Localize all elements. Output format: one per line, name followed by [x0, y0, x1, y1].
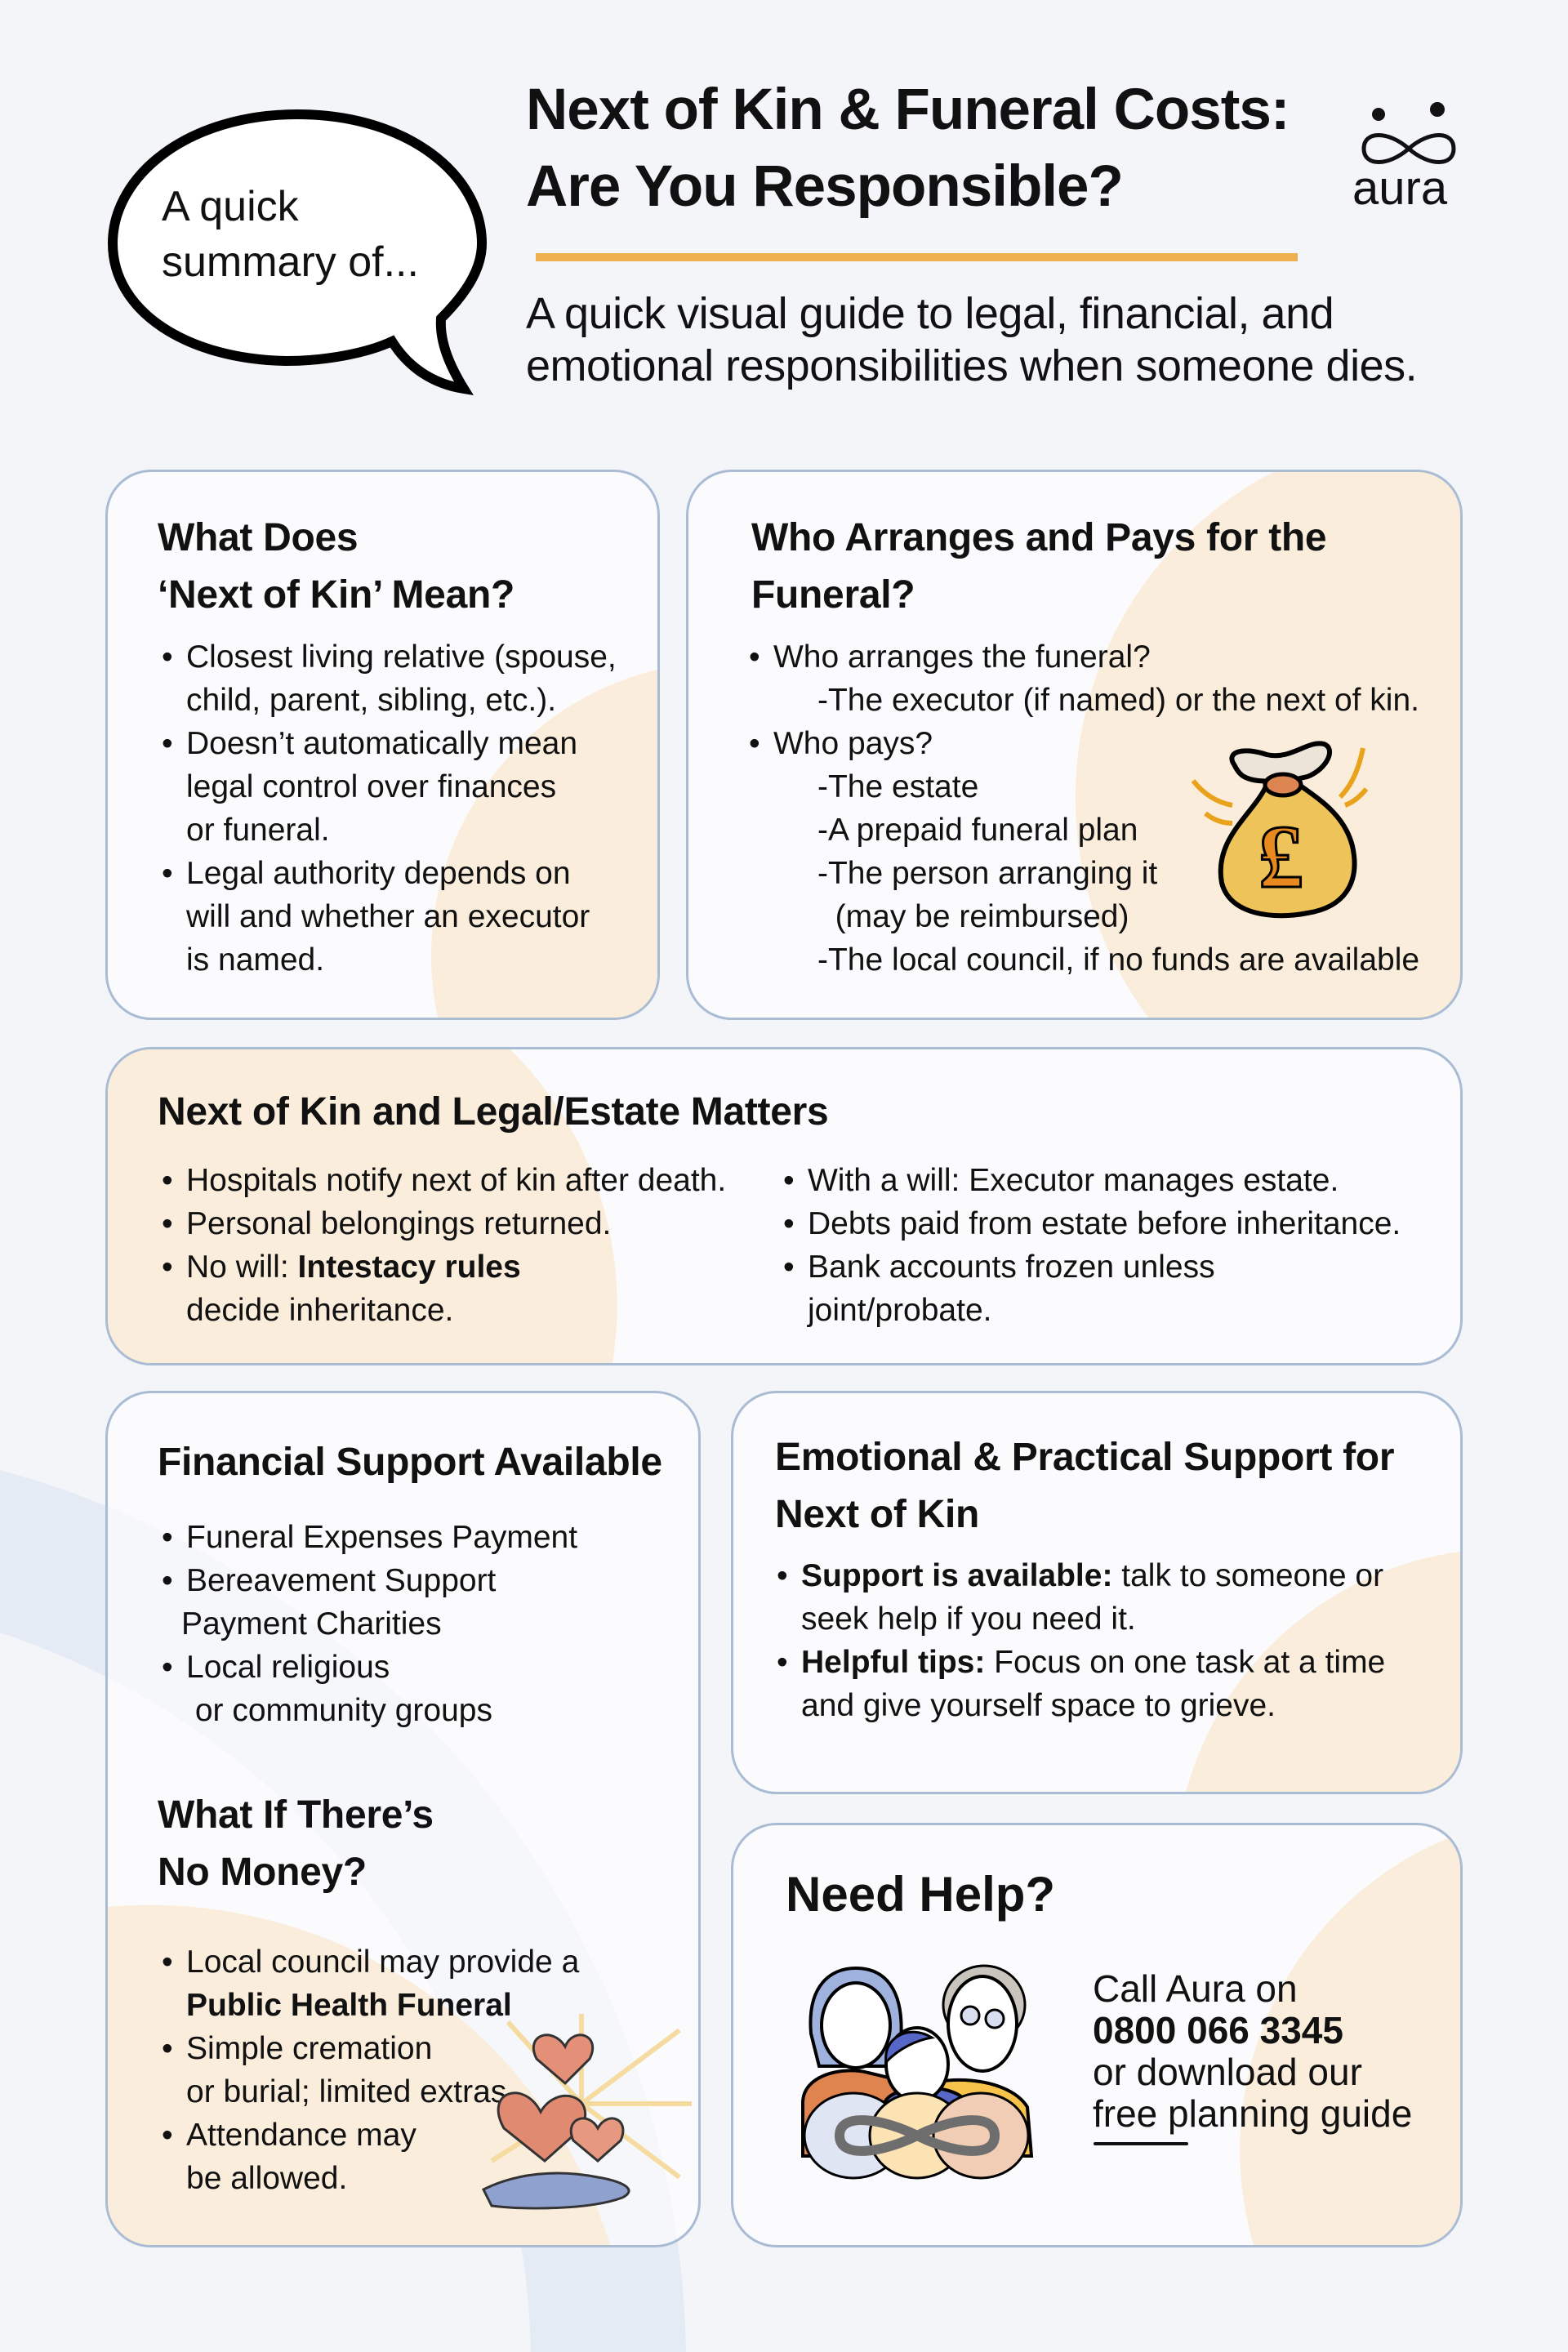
heading: [158, 516, 514, 617]
left bullets: Hospitals notify next of kin after death.: [186, 1163, 726, 1198]
bullets 2: Public Health Funeral: [186, 1988, 512, 2023]
bullets: (may be reimbursed): [835, 899, 1129, 934]
right bullets: Debts paid from estate before inheritance.: [808, 1206, 1401, 1241]
heading: What Does: [158, 516, 358, 559]
bullets: and give yourself space to grieve.: [801, 1688, 1276, 1723]
bullets: Legal authority depends on: [186, 856, 571, 891]
panel: financial support: [105, 1391, 701, 2247]
bullets: child, parent, sibling, etc.).: [186, 683, 556, 718]
heading: [775, 1436, 1394, 1536]
heading: no money: No Money?: [158, 1851, 367, 1894]
title: [526, 78, 1290, 219]
title: Are You Responsible?: [526, 154, 1123, 219]
heading: no money: What If There’s: [158, 1793, 434, 1837]
bullets: [163, 1520, 577, 1728]
right bullets: With a will: Executor manages estate.: [808, 1163, 1339, 1198]
bullets 2: Attendance may: [186, 2118, 416, 2153]
call text: Call Aura on: [1093, 1967, 1298, 2010]
bullets 2: Simple cremation: [186, 2031, 432, 2066]
heading: Financial Support Available: [158, 1441, 662, 1484]
panel: who arranges and pays: [686, 470, 1463, 1020]
bullets: legal control over finances: [186, 769, 556, 804]
icon: money bag: £: [1258, 807, 1303, 906]
panel: emotional support: [731, 1391, 1463, 1794]
subtitle: A quick visual guide to legal, financial, and: [526, 289, 1334, 338]
bullets: Who arranges the funeral?: [773, 639, 1151, 675]
right bullets: joint/probate.: [808, 1293, 991, 1328]
call text: [1093, 1967, 1412, 2135]
call text: or download our: [1093, 2051, 1362, 2093]
bullets: or funeral.: [186, 813, 330, 848]
bullets: Local religious: [186, 1650, 390, 1685]
right bullets: [784, 1163, 1401, 1328]
logo: aura: [1352, 102, 1455, 212]
heading: Emotional & Practical Support for: [775, 1436, 1394, 1479]
illustration: family: [801, 1965, 1034, 2179]
call text: free planning guide: [1093, 2092, 1412, 2135]
icon: hearts in hand: [482, 2014, 692, 2210]
bullets: Support is available: talk to someone or: [801, 1558, 1383, 1593]
heading: Next of Kin: [775, 1493, 979, 1536]
bullets: [750, 639, 1419, 978]
bullets: -The local council, if no funds are available: [817, 942, 1419, 978]
bullets: -A prepaid funeral plan: [817, 813, 1138, 848]
bullets: Funeral Expenses Payment: [186, 1520, 577, 1555]
subtitle: [526, 289, 1417, 390]
bullets 2: [163, 1944, 580, 2196]
left bullets: [163, 1163, 726, 1328]
underline stroke: [1094, 2142, 1188, 2145]
speech bubble: [108, 109, 487, 395]
bullets: is named.: [186, 942, 324, 978]
bullets 2: Local council may provide a: [186, 1944, 579, 1980]
heading: no money: [158, 1793, 434, 1894]
bullets: Doesn’t automatically mean: [186, 726, 577, 761]
panel: legal estate matters: [105, 1047, 1463, 1365]
left bullets: No will: Intestacy rules: [186, 1250, 521, 1285]
bullets: seek help if you need it.: [801, 1601, 1136, 1637]
bullets: Closest living relative (spouse,: [186, 639, 617, 675]
title underline: [536, 253, 1298, 261]
heading: Next of Kin and Legal/Estate Matters: [158, 1090, 828, 1134]
left bullets: decide inheritance.: [186, 1293, 453, 1328]
bullets: [777, 1558, 1385, 1723]
heading: Funeral?: [751, 573, 915, 617]
heading: ‘Next of Kin’ Mean?: [158, 573, 514, 617]
panel: what does next of kin mean: [105, 470, 660, 1020]
heading: Need Help?: [786, 1867, 1055, 1922]
heading: [751, 516, 1326, 617]
left bullets: Personal belongings returned.: [186, 1206, 611, 1241]
bullets: Payment Charities: [181, 1606, 442, 1642]
bullets: [163, 639, 617, 978]
bullets 2: or burial; limited extras.: [186, 2074, 515, 2109]
heading: Who Arranges and Pays for the: [751, 516, 1326, 559]
bubble text: A quick: [162, 183, 300, 230]
bullets: -The executor (if named) or the next of kin.: [817, 683, 1419, 718]
bullets: will and whether an executor: [186, 899, 590, 934]
bullets 2: be allowed.: [186, 2161, 347, 2196]
panel: need help: [731, 1823, 1463, 2247]
speech bubble: summary of...: [162, 238, 419, 286]
right bullets: Bank accounts frozen unless: [808, 1250, 1215, 1285]
icon: money bag: [1191, 741, 1369, 918]
bullets: Helpful tips: Focus on one task at a time: [801, 1645, 1385, 1680]
bullets: Bereavement Support: [186, 1563, 496, 1598]
bullets: -The person arranging it: [817, 856, 1157, 891]
bullets: Who pays?: [773, 726, 933, 761]
title: Next of Kin & Funeral Costs:: [526, 78, 1290, 142]
bullets: -The estate: [817, 769, 978, 804]
bullets: or community groups: [195, 1693, 492, 1728]
subtitle: emotional responsibilities when someone dies.: [526, 341, 1417, 390]
call text: 0800 066 3345: [1093, 2009, 1343, 2051]
